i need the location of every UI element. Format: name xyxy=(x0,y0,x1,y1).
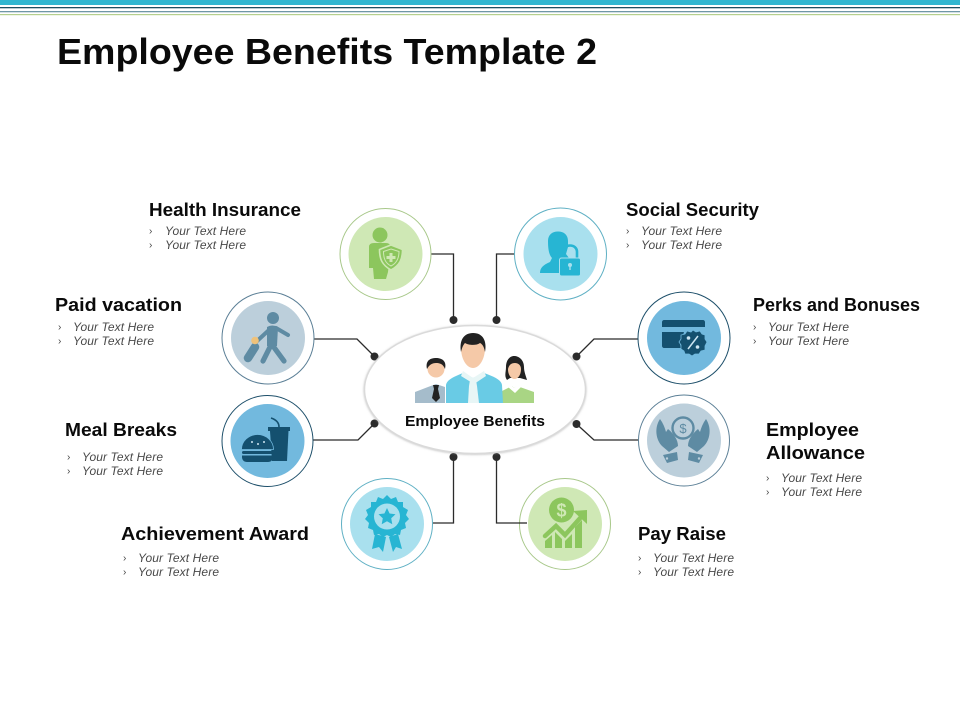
label: perks and bonuses: Perks and Bonuses xyxy=(753,295,920,315)
label: achievement award: Your Text Here xyxy=(138,551,219,565)
label: achievement award: Achievement Award xyxy=(121,524,309,544)
label: meal breaks: › xyxy=(67,466,70,477)
label: health insurance: Health Insurance xyxy=(149,200,301,220)
node: paid vacation xyxy=(222,292,314,384)
label: health insurance: Your Text Here xyxy=(165,238,246,252)
label: social security xyxy=(626,200,759,252)
icon: traveller with suitcase xyxy=(248,312,288,361)
label: employee allowance: Your Text Here xyxy=(781,471,862,485)
label: social security: › xyxy=(626,240,629,251)
label: meal breaks xyxy=(65,420,177,478)
label: health insurance: Your Text Here xyxy=(165,224,246,238)
top header bands xyxy=(0,0,960,15)
node: perks and bonuses xyxy=(638,292,730,384)
icon: rosette with star xyxy=(365,495,409,552)
label: pay raise: Pay Raise xyxy=(638,524,726,544)
label: perks and bonuses: › xyxy=(753,336,756,347)
icon: card with percent badge xyxy=(662,320,707,356)
node: achievement award xyxy=(342,478,432,570)
node: meal breaks xyxy=(222,396,313,486)
label: social security: › xyxy=(626,226,629,237)
label: paid vacation: › xyxy=(58,322,61,333)
label: pay raise: › xyxy=(638,553,641,564)
hub label: Employee Benefits xyxy=(405,413,545,430)
label: perks and bonuses: › xyxy=(753,322,756,333)
label: employee allowance: Employee xyxy=(766,420,859,440)
node: health insurance xyxy=(340,208,431,300)
icon: group of three employees xyxy=(415,333,534,403)
label: employee allowance: Your Text Here xyxy=(781,485,862,499)
icon: person with padlock xyxy=(540,232,580,276)
label: pay raise: › xyxy=(638,567,641,578)
label: employee allowance xyxy=(766,420,865,499)
label: achievement award xyxy=(121,524,309,579)
label: employee allowance: › xyxy=(766,487,769,498)
label: pay raise xyxy=(638,524,734,579)
label: health insurance: › xyxy=(149,226,152,237)
label: pay raise: Your Text Here xyxy=(653,565,734,579)
label: social security: Your Text Here xyxy=(641,238,722,252)
label: social security: Social Security xyxy=(626,200,759,220)
label: achievement award: Your Text Here xyxy=(138,565,219,579)
node: employee allowance xyxy=(638,395,730,486)
label: paid vacation xyxy=(55,295,182,348)
label: pay raise: Your Text Here xyxy=(653,551,734,565)
label: perks and bonuses: Your Text Here xyxy=(768,320,849,334)
label: paid vacation: Your Text Here xyxy=(73,320,154,334)
label: perks and bonuses: Your Text Here xyxy=(768,334,849,348)
central hub: employee benefits xyxy=(364,326,586,454)
label: health insurance: › xyxy=(149,240,152,251)
icon: person with shield xyxy=(369,228,402,279)
label: meal breaks: Meal Breaks xyxy=(65,420,177,440)
label: paid vacation: Paid vacation xyxy=(55,295,182,315)
label: meal breaks: Your Text Here xyxy=(82,464,163,478)
label: employee allowance: › xyxy=(766,473,769,484)
node: social security xyxy=(514,208,606,300)
node: pay raise xyxy=(519,478,610,570)
connector lines and dots xyxy=(313,254,638,523)
label: perks and bonuses xyxy=(753,295,920,348)
label: social security: Your Text Here xyxy=(641,224,722,238)
title: Employee Benefits Template 2 xyxy=(57,31,597,72)
label: achievement award: › xyxy=(123,567,126,578)
label: meal breaks: › xyxy=(67,452,70,463)
icon: burger and drink xyxy=(242,418,290,462)
label: health insurance xyxy=(149,200,301,252)
icon: dollar coin and rising chart: $ xyxy=(556,500,567,520)
label: paid vacation: › xyxy=(58,336,61,347)
label: achievement award: › xyxy=(123,553,126,564)
label: paid vacation: Your Text Here xyxy=(73,334,154,348)
icon: hands holding coin: $ xyxy=(679,421,687,436)
label: employee allowance: Allowance xyxy=(766,443,865,463)
label: meal breaks: Your Text Here xyxy=(82,450,163,464)
